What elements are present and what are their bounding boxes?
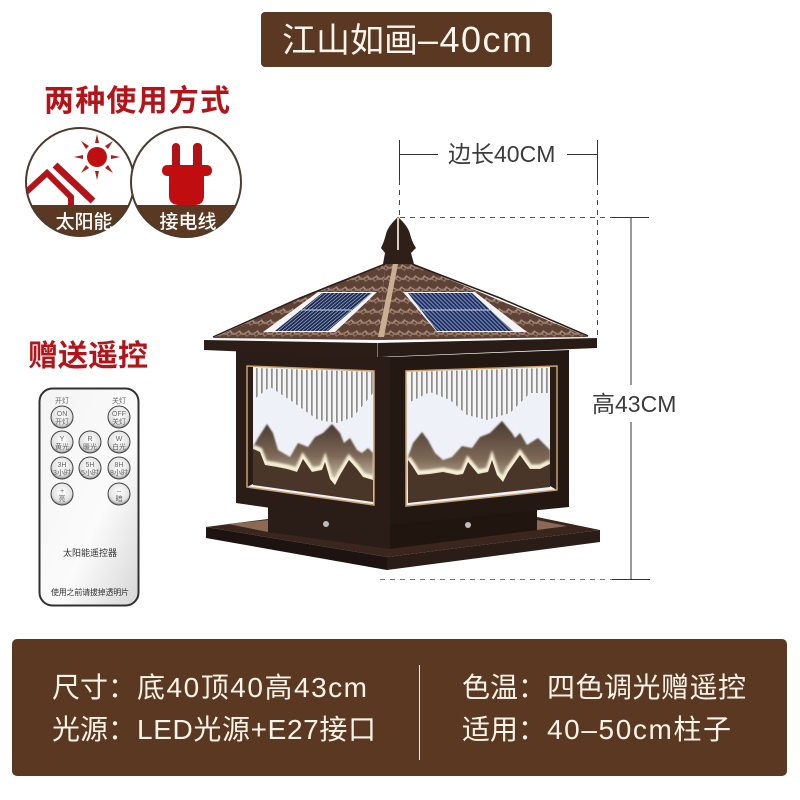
remote buttons: 5小时 (81, 468, 99, 477)
title bar: 江山如画 (282, 22, 418, 60)
remote buttons: 3小时 (53, 468, 71, 477)
lamp base plate (206, 517, 600, 570)
remote buttons: 关灯 (112, 417, 126, 426)
remote control: 开灯 (55, 396, 69, 405)
roof ridge (378, 264, 398, 337)
solar panel right (403, 292, 527, 332)
roof eave (204, 338, 597, 357)
roof tiles (213, 264, 588, 340)
remote buttons: 开灯 (55, 417, 69, 426)
spec: suitable post: 40–50cm柱子 (547, 714, 731, 745)
spec: suitable post (462, 714, 731, 745)
heading: free remote: 赠送遥控 (28, 340, 148, 373)
remote buttons: OFF (112, 411, 126, 418)
height dimension: 高43CM (592, 391, 676, 417)
remote buttons: 8H (115, 462, 123, 469)
title bar (261, 12, 552, 67)
remote buttons: + (60, 488, 64, 495)
spec: size: 尺寸： (52, 672, 136, 703)
remote buttons: Y (60, 436, 65, 443)
right glass panel (406, 366, 557, 506)
remote control: 关灯 (112, 396, 126, 405)
spec: light source: 光源： (52, 714, 136, 745)
remote buttons: 黄光 (55, 442, 69, 451)
solar panel left (263, 292, 377, 332)
icon: mains plug: 接电线 (159, 211, 217, 233)
remote control: 使用之前请拔掉透明片 (51, 587, 129, 597)
spec: light source: LED光源+E27接口 (137, 714, 376, 745)
spec panel (12, 639, 787, 776)
remote buttons: 白光 (112, 442, 126, 451)
remote buttons: ON (57, 411, 67, 418)
spec: suitable post: 适用： (462, 714, 546, 745)
icon: mains plug (130, 126, 242, 238)
icon: solar power: 太阳能 (55, 211, 113, 233)
remote buttons: 暖光 (83, 442, 97, 451)
spec: colour temperature: 四色调光赠遥控 (547, 672, 746, 703)
spec: size: 底40顶40高43cm (137, 672, 367, 703)
remote buttons (51, 406, 130, 505)
remote buttons: 亮 (58, 494, 66, 503)
remote buttons: – (117, 488, 121, 495)
finial (381, 217, 416, 264)
remote buttons: 8小时 (110, 468, 128, 477)
remote buttons: 3H (58, 462, 66, 469)
remote control (40, 388, 138, 606)
remote buttons: R (87, 436, 93, 443)
lamp body (236, 350, 569, 525)
left glass panel (247, 366, 374, 505)
remote control: 太阳能遥控器 (63, 547, 117, 558)
remote buttons: 暗 (116, 494, 122, 503)
icon: solar power (25, 127, 132, 237)
remote buttons: 5H (86, 462, 94, 469)
remote buttons: W (116, 436, 123, 443)
heading: two usage modes: 两种使用方式 (44, 85, 230, 118)
solar post lamp (204, 217, 600, 570)
width dimension: 边长40CM (448, 141, 555, 167)
title bar: –40cm (418, 19, 532, 60)
spec: colour temperature: 色温： (462, 672, 546, 703)
lamp pedestal (268, 505, 537, 549)
